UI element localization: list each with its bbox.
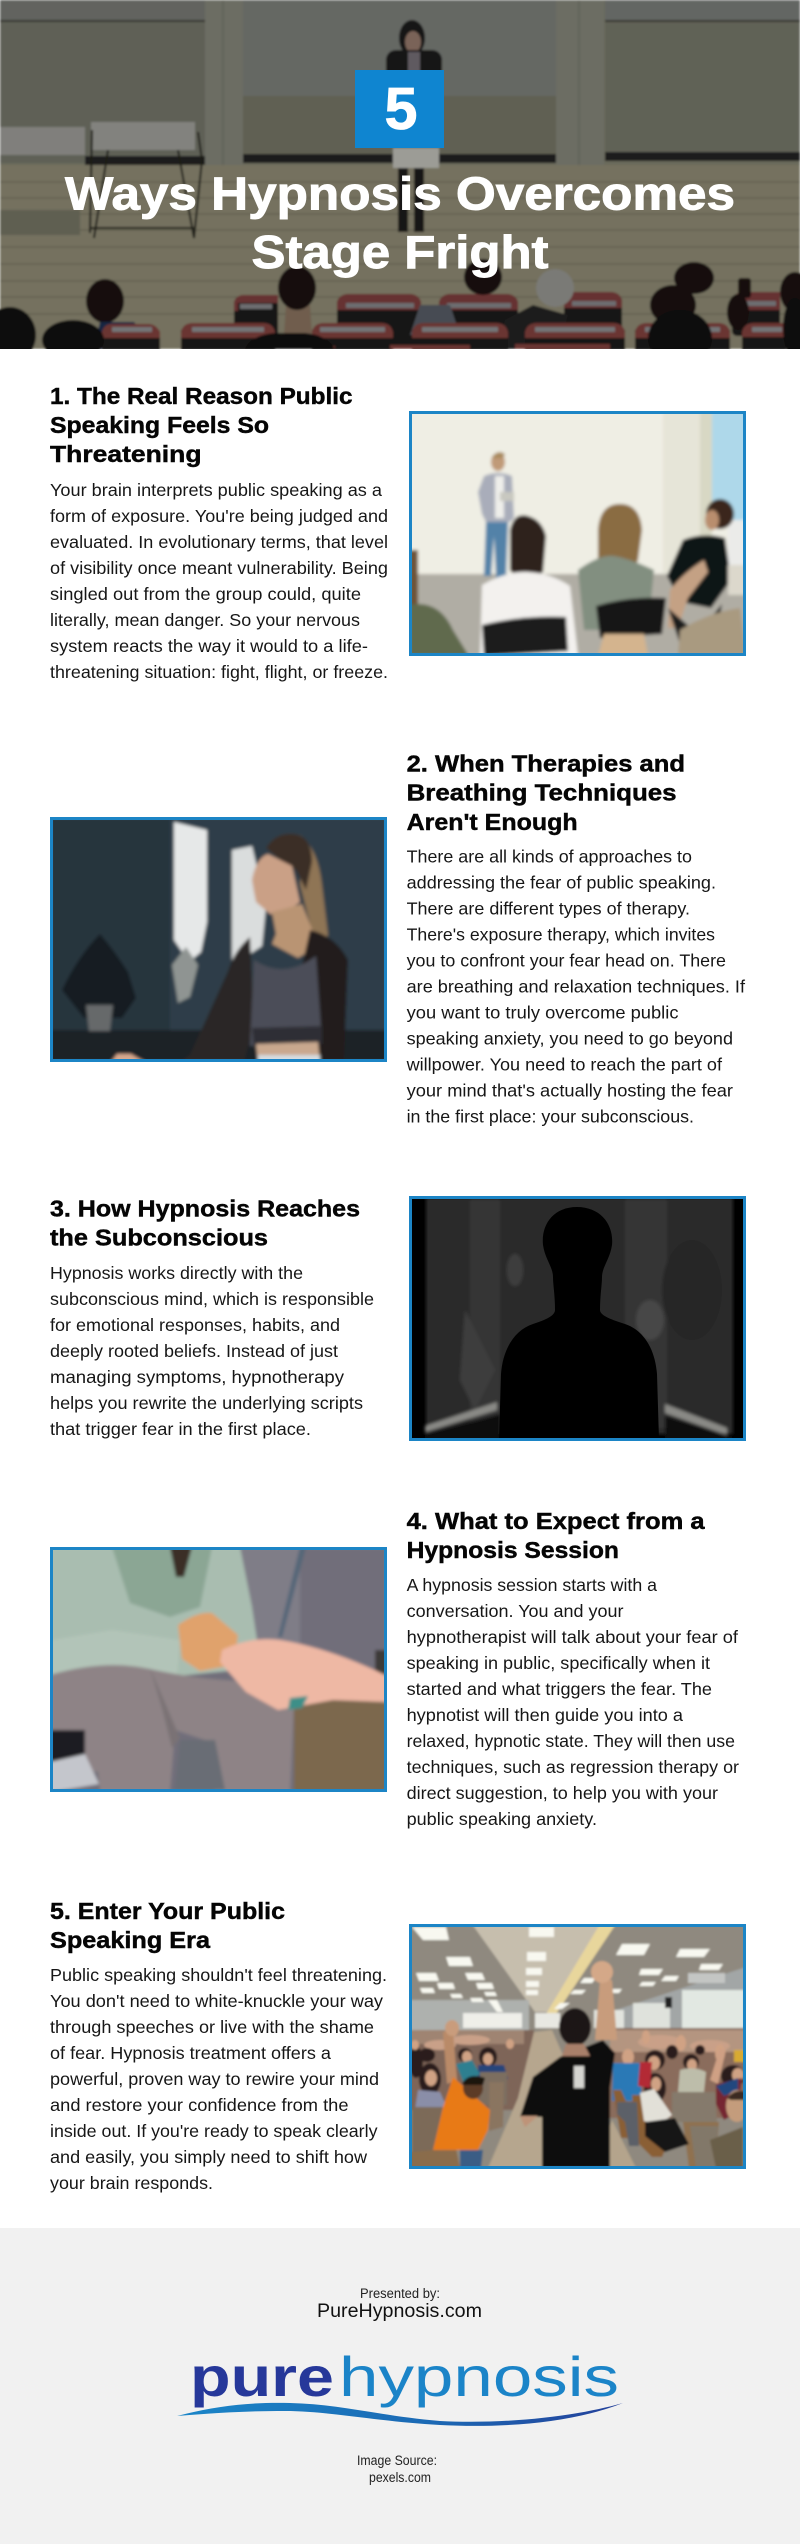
plant xyxy=(62,934,136,1018)
orange shirt man xyxy=(443,2030,457,2084)
dreadlock person xyxy=(598,504,642,582)
body text 4: A hypnosis session starts with a xyxy=(407,1575,657,1595)
body text 2: willpower. You need to reach the part of xyxy=(406,1055,722,1075)
sweater xyxy=(50,1547,258,1681)
heading 3: 3. How Hypnosis Reaches xyxy=(50,1196,360,1222)
title xyxy=(65,168,735,278)
body text 2: There are different types of therapy. xyxy=(407,899,690,919)
presented by text: Presented by: xyxy=(360,2286,440,2301)
woman xyxy=(300,835,328,955)
number badge xyxy=(355,70,444,148)
photo 4: hands holding in support xyxy=(50,1547,387,1792)
body text 4: speaking in public, specifically when it xyxy=(407,1653,710,1673)
body text 1: singled out from the group could, quite xyxy=(50,584,361,604)
heading 2: Aren't Enough xyxy=(407,809,578,835)
body text 3: managing symptoms, hypnotherapy xyxy=(50,1367,344,1387)
body text 4 xyxy=(407,1575,739,1829)
body text 5: through speeches or live with the shame xyxy=(50,2017,374,2037)
body text 2: in the first place: your subconscious. xyxy=(407,1107,694,1127)
body text 2: are breathing and relaxation techniques. If xyxy=(407,977,745,997)
body text 2: you want to truly overcome public xyxy=(407,1003,679,1023)
logo: purehypnosis: pure xyxy=(190,2345,334,2408)
body text 2: There's exposure therapy, which invites xyxy=(407,925,715,945)
right foreground man xyxy=(710,2127,743,2168)
body text 5: your brain responds. xyxy=(50,2173,213,2193)
photo 2: woman meditating xyxy=(50,817,387,1062)
number badge: 5 xyxy=(384,76,418,142)
left pews xyxy=(412,2107,443,2153)
body text 3 xyxy=(50,1263,374,1439)
heading 2 xyxy=(407,751,685,835)
section 2 xyxy=(50,751,745,1127)
body text 5 xyxy=(50,1965,387,2193)
body text 5: powerful, proven way to rewire your mind xyxy=(50,2069,379,2089)
body text 1: threatening situation: fight, flight, or freeze. xyxy=(50,662,388,682)
body text 5: Public speaking shouldn't feel threatening. xyxy=(50,1965,387,1985)
heading 1: Speaking Feels So xyxy=(50,412,269,438)
hands xyxy=(178,1613,238,1671)
main speaker xyxy=(595,1980,617,2040)
heading 5 xyxy=(50,1898,285,1953)
speaker xyxy=(491,453,505,471)
white shirt person xyxy=(510,515,546,578)
body text 3: Hypnosis works directly with the xyxy=(50,1263,303,1283)
body text 1 xyxy=(50,480,388,682)
body text 5: of fear. Hypnosis treatment offers a xyxy=(50,2043,331,2063)
body text 3: subconscious mind, which is responsible xyxy=(50,1289,374,1309)
body text 1: Your brain interprets public speaking as a xyxy=(50,480,382,500)
body text 2: your mind that's actually hosting the fear xyxy=(407,1081,733,1101)
image source credit: Image Source: xyxy=(357,2453,437,2468)
body text 4: conversation. You and your xyxy=(407,1601,624,1621)
body text 2: speaking anxiety, you need to go beyond xyxy=(407,1029,733,1049)
body text 4: direct suggestion, to help you with your xyxy=(407,1783,718,1803)
body text 5: and easily, you simply need to shift how xyxy=(50,2147,367,2167)
heading 1 xyxy=(50,383,352,467)
trousers xyxy=(50,1665,294,1792)
heading 4: Hypnosis Session xyxy=(407,1537,619,1563)
body text 3: helps you rewrite the underlying scripts xyxy=(50,1393,363,1413)
body text 4: public speaking anxiety. xyxy=(407,1809,597,1829)
heading 4: 4. What to Expect from a xyxy=(407,1508,706,1534)
man right xyxy=(706,499,734,529)
title: Ways Hypnosis Overcomes xyxy=(65,168,735,220)
body text 4: started and what triggers the fear. The xyxy=(407,1679,712,1699)
body text 2: addressing the fear of public speaking. xyxy=(407,873,716,893)
heads front xyxy=(0,298,800,366)
back seats xyxy=(234,296,780,348)
section 5 xyxy=(50,1898,748,2193)
logo: purehypnosis: hypnosis xyxy=(339,2345,619,2408)
body text 1: evaluated. In evolutionary terms, that level xyxy=(50,532,388,552)
blue shirt man legs xyxy=(617,2102,639,2146)
photo 3: silhouette of a person xyxy=(409,1196,746,1441)
heading 2: 2. When Therapies and xyxy=(407,751,685,777)
footer panel xyxy=(0,2228,800,2544)
patterned woman xyxy=(640,2089,672,2125)
heading 1: Threatening xyxy=(50,441,202,467)
website name: PureHypnosis.com xyxy=(317,2300,482,2322)
heading 3: the Subconscious xyxy=(50,1225,268,1251)
body text 4: hypnotherapist will talk about your fear of xyxy=(407,1627,738,1647)
header background photo: speaker in auditorium xyxy=(0,0,800,349)
left person xyxy=(409,550,418,610)
body text 2 xyxy=(406,847,745,1127)
section 1 xyxy=(50,383,746,682)
image source credit xyxy=(357,2453,437,2485)
body text 2: There are all kinds of approaches to xyxy=(407,847,692,867)
aisle xyxy=(488,2030,612,2168)
heading 5: 5. Enter Your Public xyxy=(50,1898,285,1924)
photo 5: speaker facing raised hands in a crowded hall xyxy=(409,1924,748,2169)
heads back xyxy=(284,305,312,335)
title: Stage Fright xyxy=(252,226,548,278)
heading 2: Breathing Techniques xyxy=(407,780,677,806)
heading 3 xyxy=(50,1196,360,1251)
body text 5: You don't need to white-knuckle your way xyxy=(50,1991,383,2011)
body text 1: literally, mean danger. So your nervous xyxy=(50,610,360,630)
header banner xyxy=(0,0,800,366)
body text 5: and restore your confidence from the xyxy=(50,2095,348,2115)
right pews xyxy=(613,2090,637,2138)
body text 1: form of exposure. You're being judged and xyxy=(50,506,388,526)
body text 4: techniques, such as regression therapy or xyxy=(407,1757,739,1777)
body text 3: deeply rooted beliefs. Instead of just xyxy=(50,1341,338,1361)
body text 3: for emotional responses, habits, and xyxy=(50,1315,340,1335)
section 4 xyxy=(50,1508,739,1829)
body text 4: relaxed, hypnotic state. They will then use xyxy=(407,1731,735,1751)
heading 4 xyxy=(407,1508,706,1563)
body text 4: hypnotist will then guide you into a xyxy=(407,1705,683,1725)
crowd xyxy=(409,2030,534,2110)
image source credit: pexels.com xyxy=(369,2470,431,2485)
front seats xyxy=(102,330,786,350)
body text 1: of visibility once meant vulnerability. Being xyxy=(50,558,388,578)
body text 3: that trigger fear in the first place. xyxy=(50,1419,311,1439)
heading 1: 1. The Real Reason Public xyxy=(50,383,352,409)
photo 1: speaker presenting to seated audience xyxy=(409,411,746,656)
section 3 xyxy=(50,1196,746,1441)
logo: purehypnosis xyxy=(177,2345,623,2426)
body text 1: system reacts the way it would to a life- xyxy=(50,636,368,656)
body text 5: inside out. If you're ready to speak clearly xyxy=(50,2121,378,2141)
woman xyxy=(399,20,425,56)
body text 2: you to confront your fear head on. There xyxy=(407,951,726,971)
heading 5: Speaking Era xyxy=(50,1927,211,1953)
